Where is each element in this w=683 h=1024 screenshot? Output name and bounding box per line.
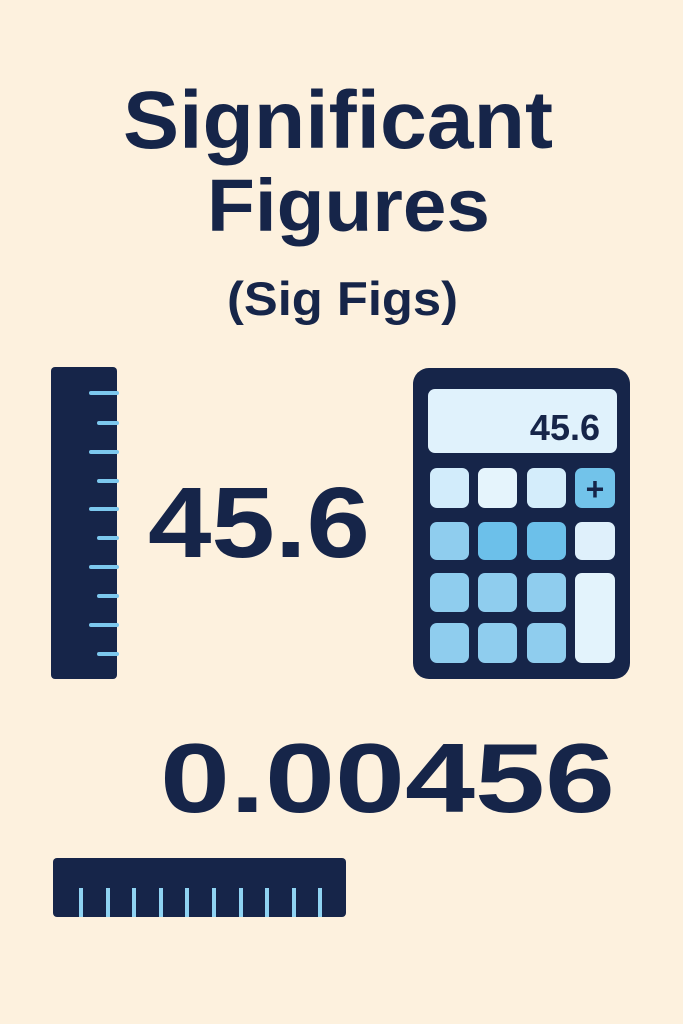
calculator screen: 45.6 [530,407,600,448]
icon: horizontal ruler [53,858,346,917]
number: 45.6: 45.6 [148,467,370,579]
title: Significant [123,75,553,166]
calculator keys [430,468,615,663]
number: 0.00456: 0.00456 [160,723,615,833]
calculator keys: + [586,471,604,507]
title [123,75,553,325]
icon: calculator [413,368,630,679]
calculator screen [428,389,617,453]
title: Figures [207,164,490,247]
subtitle: (Sig Figs) [227,272,458,325]
icon: vertical ruler [51,367,117,679]
